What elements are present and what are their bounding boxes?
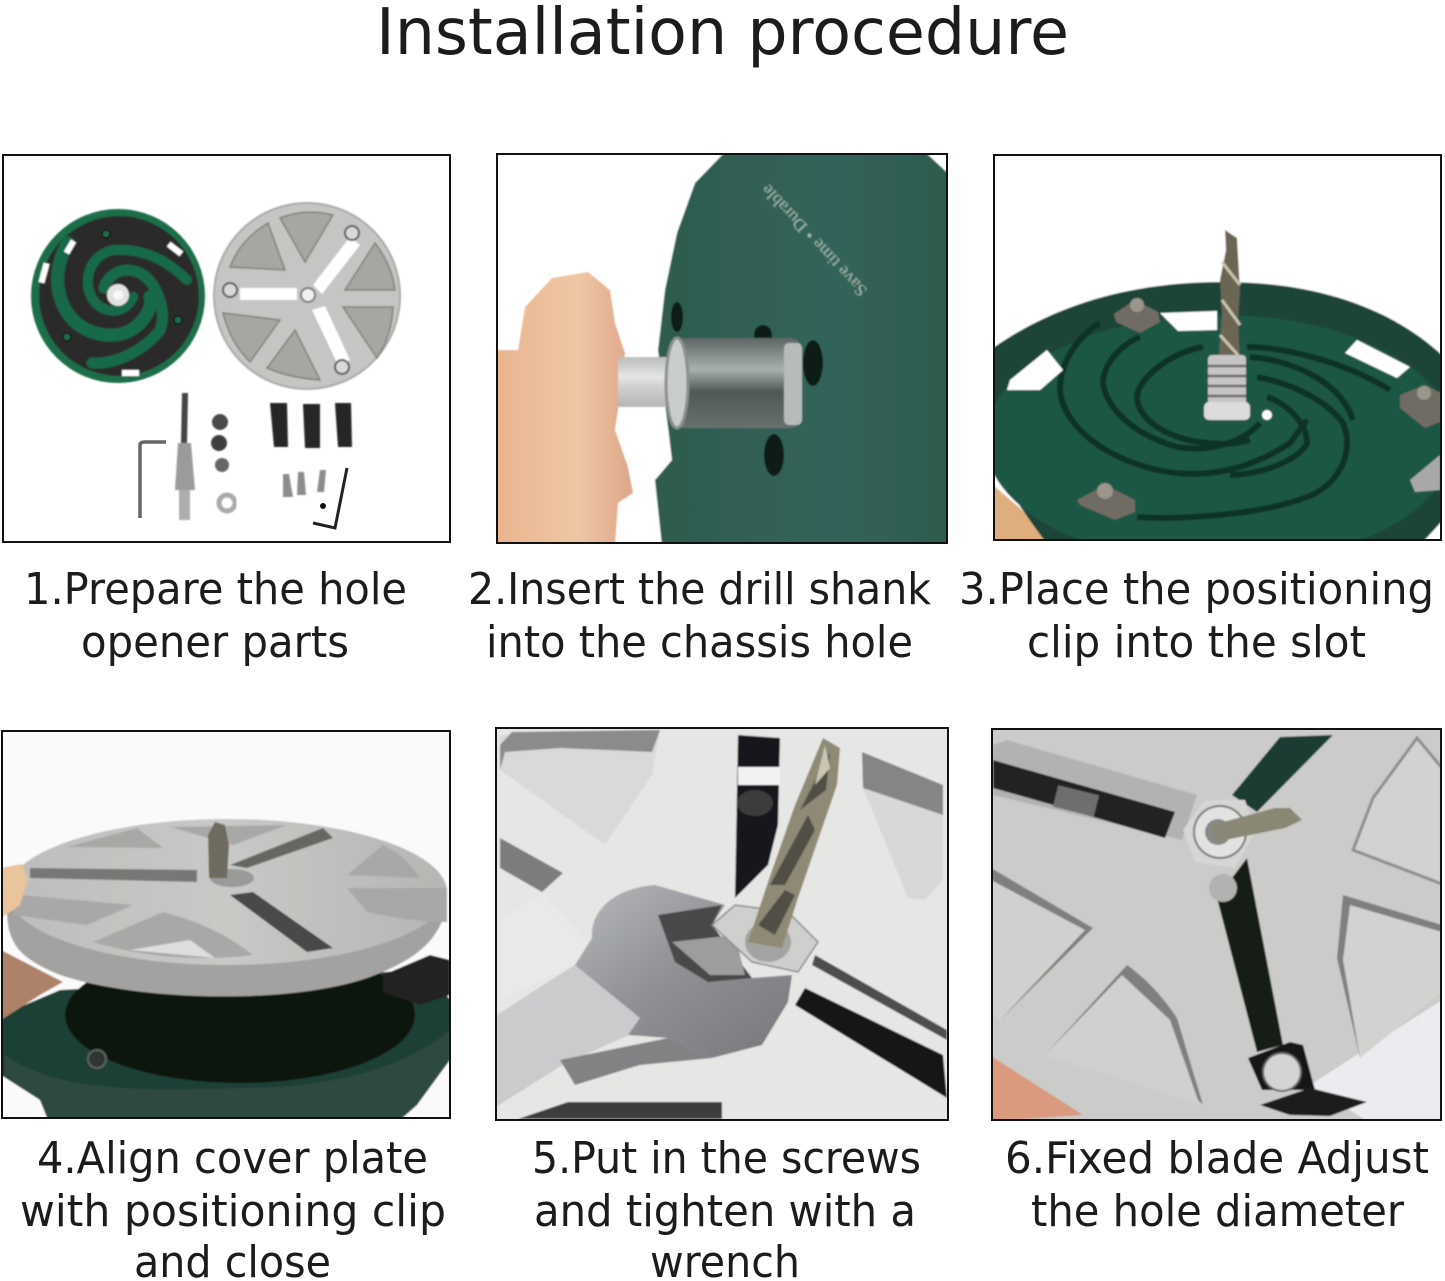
bolt on base [88, 1050, 106, 1068]
gray opening lower right [1410, 455, 1440, 492]
finger [496, 272, 633, 546]
central slot [735, 735, 780, 898]
top left slot [993, 740, 1197, 840]
disc outer wall [990, 282, 1445, 545]
disc floor [995, 315, 1440, 539]
caption: step 6 [1005, 1133, 1429, 1237]
slots [230, 892, 333, 952]
spiral grooves [1060, 323, 1390, 518]
drill bit [1212, 808, 1302, 842]
hub with nut [1183, 800, 1255, 868]
drill tip and hub [208, 822, 254, 887]
lower wedge [1045, 965, 1203, 1105]
panel: step 1 parts photo [3, 155, 450, 542]
upper right wedge [1353, 738, 1442, 884]
hand skin [1, 950, 63, 1020]
left lower tab [500, 895, 590, 1000]
caption: step 1: opener parts [81, 617, 349, 668]
bottom dark shape [518, 1102, 722, 1119]
panel 6 frame [992, 729, 1441, 1120]
caption: step 5: 5.Put in the screws [532, 1133, 921, 1184]
icon: three blades [270, 403, 352, 448]
icon: small hex key and dot [313, 468, 347, 528]
panel 5 frame [496, 728, 948, 1120]
black slot [795, 988, 947, 1098]
central black slot [1217, 858, 1283, 1052]
chassis holes [671, 302, 823, 476]
panel: step 4 align cover plate photo [1, 730, 451, 1120]
panel 1 frame [3, 155, 450, 542]
lower right wedge [1337, 895, 1442, 1058]
green chassis plate [655, 152, 950, 546]
caption: step 5: and tighten with a [534, 1186, 916, 1237]
top left wedge [500, 730, 660, 845]
thin groove [812, 955, 947, 1040]
panel 3 frame [994, 155, 1441, 540]
left band [500, 838, 563, 892]
caption: step 3 [959, 564, 1434, 668]
green base [1, 970, 451, 1120]
icon: three screws [283, 470, 326, 497]
icon: drill bit with adapter [175, 393, 195, 520]
caption: step 5 [532, 1133, 921, 1281]
icon: left hex key [140, 442, 166, 518]
black interior [64, 974, 416, 1084]
round pin in slot [1209, 874, 1237, 902]
wrench [497, 885, 792, 1106]
wedge highlights [130, 940, 215, 958]
caption: step 6: 6.Fixed blade Adjust [1005, 1133, 1429, 1184]
caption: step 4: 4.Align cover plate [37, 1133, 428, 1184]
silver plate top [7, 819, 447, 965]
caption: step 3: clip into the slot [1027, 617, 1366, 668]
hex nut [712, 905, 818, 972]
hand skin [991, 1056, 1083, 1121]
wrench jaw opening [658, 905, 752, 982]
outside of disc lower right [1310, 1000, 1442, 1121]
drill bit [748, 738, 840, 948]
panel: step 6 adjust hole diameter photo [991, 728, 1442, 1121]
caption: step 4: with positioning clip [20, 1186, 446, 1237]
panel 4 frame [2, 731, 450, 1118]
panel: step 2 insert drill shank photo [496, 152, 950, 546]
right wedge [863, 788, 943, 900]
caption: step 6: the hole diameter [1031, 1186, 1405, 1237]
skin at lower left [995, 486, 1045, 539]
drill shank and socket [618, 338, 802, 428]
left wedge [991, 868, 1093, 1020]
base lower rim [5, 1030, 450, 1120]
right clip [383, 955, 450, 1005]
finger [1, 864, 28, 918]
blade bracket and bolt [1248, 1042, 1367, 1116]
caption: step 2: into the chassis hole [486, 617, 913, 668]
drill bit with threaded adapter [1204, 230, 1250, 420]
white slots [1007, 311, 1410, 420]
icon: clips and nut [211, 414, 235, 511]
silver plate edge [6, 909, 442, 998]
chassis engraved text: Save time • Durable [757, 180, 871, 300]
caption: step 4 [20, 1133, 446, 1281]
recessed wedges [13, 825, 447, 958]
top right green slot [1232, 735, 1333, 812]
caption: step 1: 1.Prepare the hole [24, 564, 407, 615]
panel: step 3 positioning clips photo [985, 154, 1445, 565]
panel 2 frame [497, 154, 947, 543]
panel: step 5 tighten with wrench photo [495, 727, 949, 1121]
positioning clips [1077, 298, 1445, 520]
caption: step 2: 2.Insert the drill shank [468, 564, 931, 615]
caption: step 1 [24, 564, 407, 668]
icon: silver cover plate [214, 203, 400, 389]
caption: step 2 [468, 564, 931, 668]
icon: green chassis disc [31, 209, 205, 383]
